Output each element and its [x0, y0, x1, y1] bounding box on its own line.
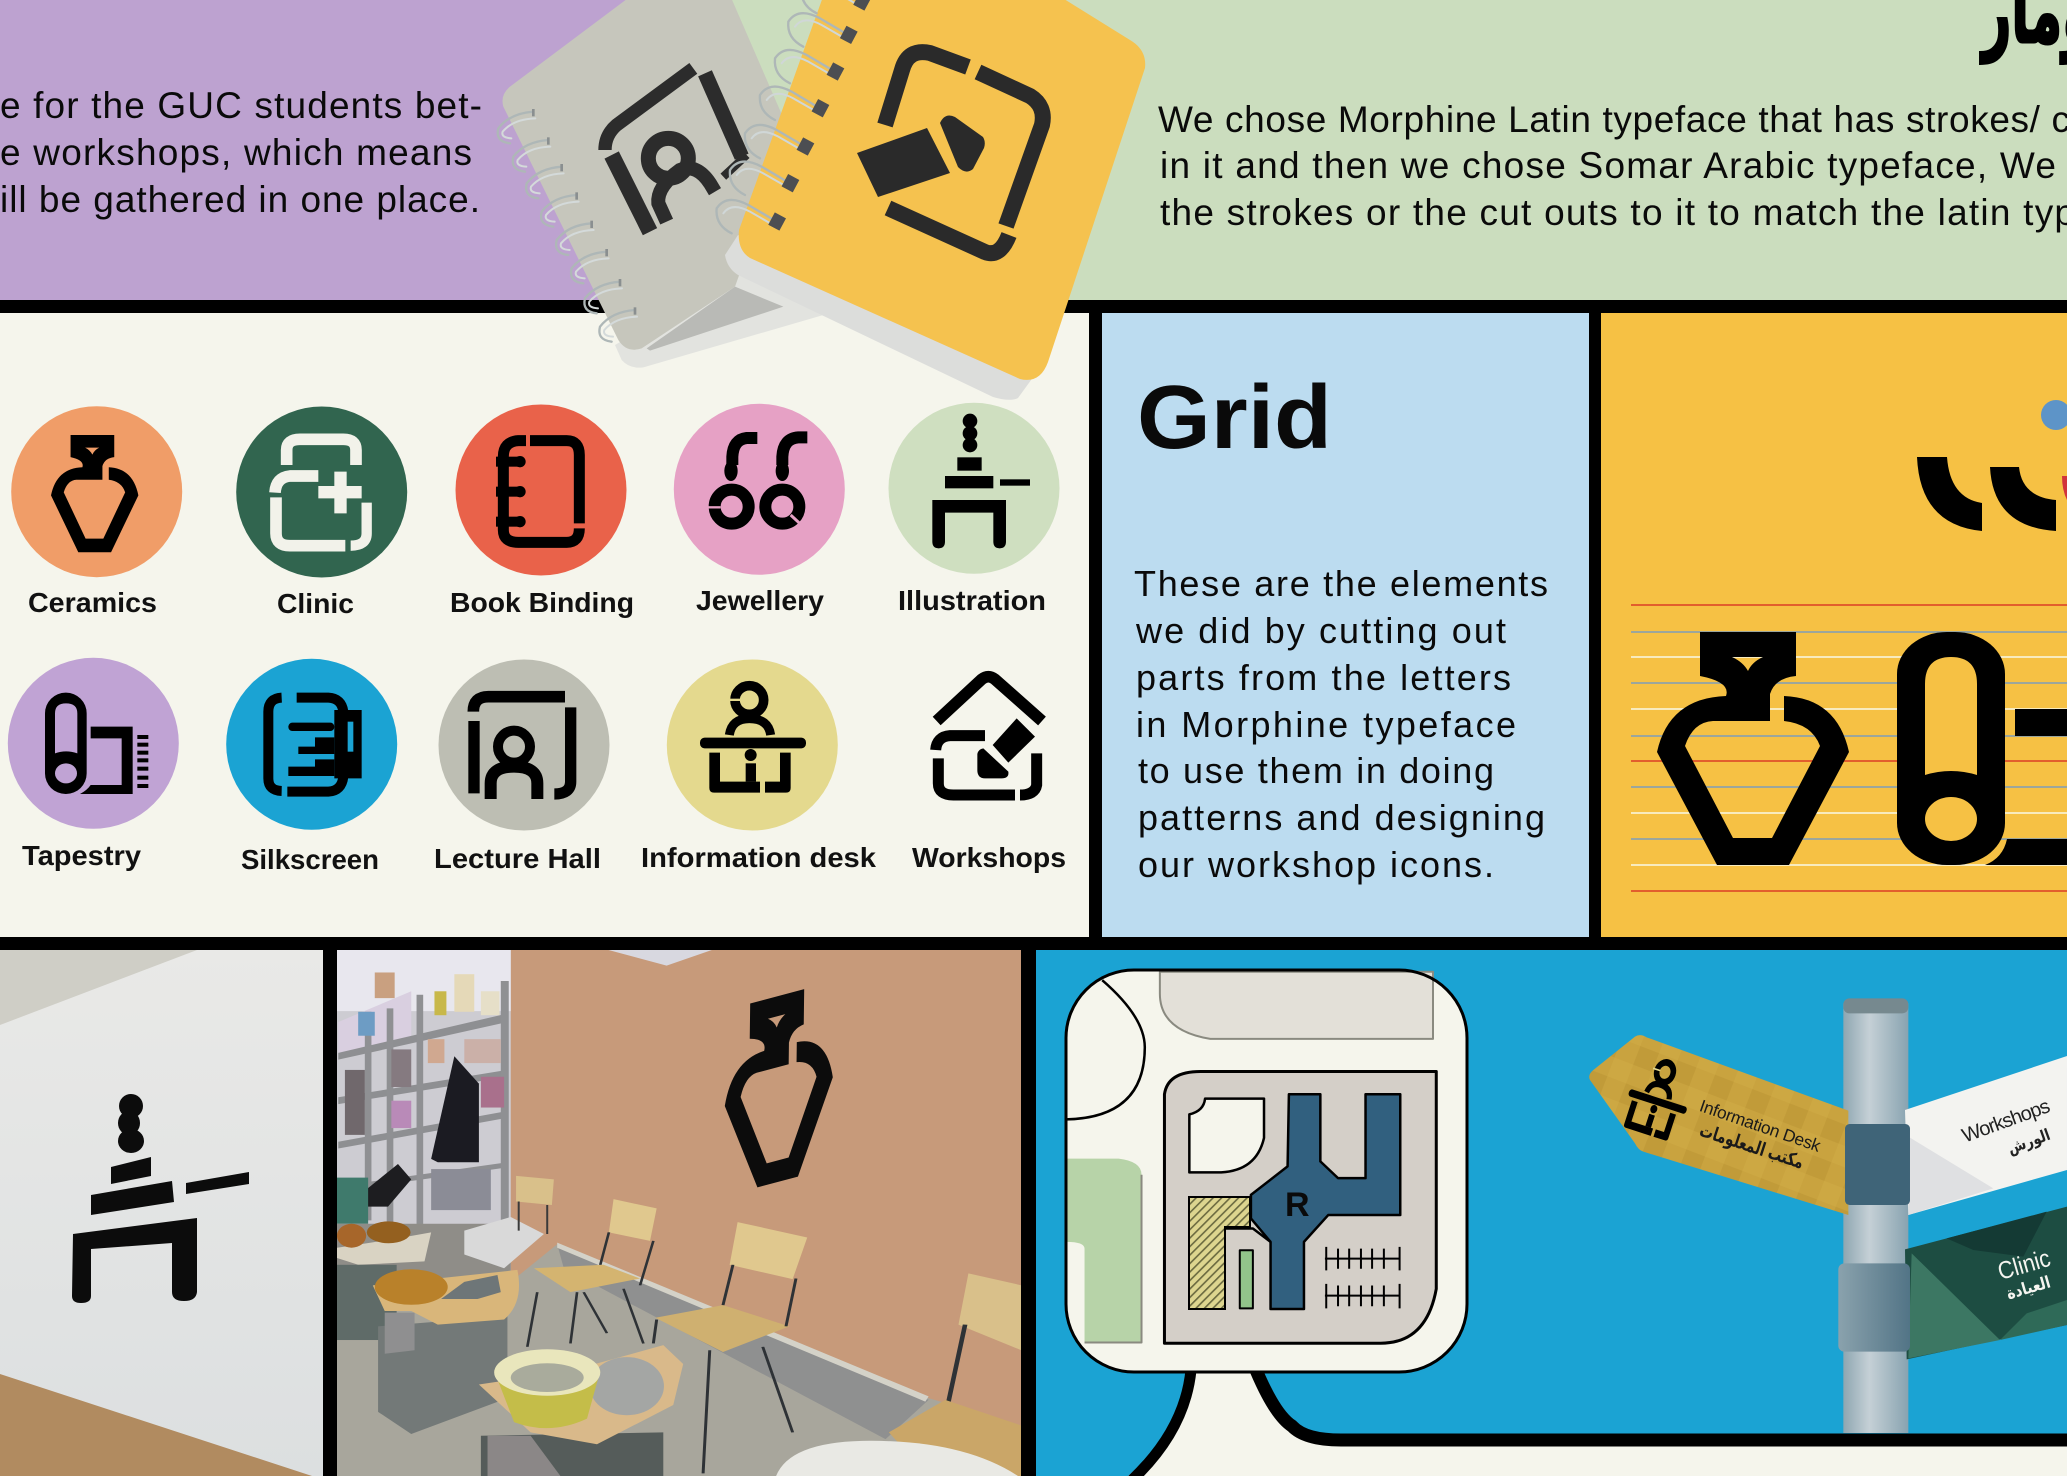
text block: concept intro: e workshops, which means — [0, 132, 472, 173]
panel: blue wayfinding — [1036, 950, 2067, 1476]
sign: Workshops — [1905, 1056, 2067, 1215]
panel: purple concept intro — [0, 0, 720, 300]
icon: Illustration — [888, 403, 1060, 616]
text block: grid description: in Morphine typeface — [1136, 704, 1516, 745]
map label R: R — [1285, 1186, 1310, 1224]
bracket: upper — [1845, 1124, 1910, 1205]
wheel 2 — [481, 1432, 663, 1476]
icon: Clinic — [236, 406, 407, 619]
panel: green typography — [720, 0, 2067, 300]
icon: Information desk — [641, 660, 876, 873]
icon: Jewellery — [674, 404, 845, 616]
label: Jewellery: Jewellery — [696, 585, 824, 616]
icon: Silkscreen — [226, 659, 397, 875]
text block: concept intro — [0, 85, 482, 220]
map hatched area — [1189, 1197, 1250, 1309]
chair 1 — [516, 1176, 554, 1205]
chair 2 — [609, 1199, 657, 1241]
map drawing — [1066, 972, 1436, 1343]
icon: Lecture Hall — [434, 660, 610, 874]
bracket: lower — [1838, 1263, 1910, 1352]
map: campus site plan — [1066, 970, 1467, 1372]
text block: typeface description: in it and then we chose Somar Arabic typeface, We — [1160, 145, 2056, 186]
label: Workshops: Workshops — [912, 842, 1066, 873]
chair 4 — [958, 1273, 1021, 1350]
text block: grid description: our workshop icons. — [1138, 844, 1494, 885]
grey notebook — [498, 0, 823, 368]
text block: grid description: These are the elements — [1134, 563, 1548, 604]
yellow notebook icon — [857, 52, 1043, 253]
label: Tapestry: Tapestry — [22, 840, 141, 871]
text block: grid description: we did by cutting out — [1135, 610, 1506, 651]
icon: blue dot — [2041, 400, 2067, 430]
label: Lecture Hall: Lecture Hall — [434, 843, 601, 874]
icon: construction vase — [1657, 632, 1849, 865]
chart: construction grid lines — [1631, 605, 2067, 891]
heading: Grid: Grid — [1137, 368, 1332, 468]
text block: concept intro: ill be gathered in one place. — [0, 179, 480, 220]
sign: Clinic: العيادة — [2004, 1273, 2053, 1303]
label: Silkscreen: Silkscreen — [241, 844, 379, 875]
icon: vase wall decal — [724, 981, 834, 1196]
sign: Clinic: Clinic — [1995, 1245, 2054, 1286]
text block: concept intro: e for the GUC students bet- — [0, 85, 482, 126]
wheel 1 — [378, 1316, 507, 1434]
text block: grid description: patterns and designing — [1138, 797, 1545, 838]
chair 3 — [730, 1222, 807, 1279]
pole cap — [1843, 998, 1908, 1013]
icon: Tapestry — [8, 658, 179, 871]
white tub — [776, 1441, 1018, 1476]
text block: grid description: to use them in doing — [1138, 750, 1494, 791]
panel: grid explanation — [1102, 313, 1589, 937]
grey notebook icon — [605, 68, 747, 232]
sign: Information Desk: مكتب المعلومات — [1697, 1119, 1807, 1174]
text block: typeface description: We chose Morphine Latin typeface that has strokes/ c — [1158, 99, 2067, 140]
grey notebook pages — [615, 273, 823, 368]
pole — [1843, 1003, 1908, 1433]
label: Clinic: Clinic — [277, 588, 354, 619]
sign: Clinic — [1905, 1207, 2067, 1359]
label: Illustration: Illustration — [898, 585, 1046, 616]
text block: grid description — [1134, 563, 1548, 885]
yellow notebook pages — [725, 235, 1034, 400]
text block: typeface description — [1158, 99, 2067, 233]
yellow notebook cover — [739, 0, 1145, 380]
icon: Book Binding — [450, 404, 634, 618]
grey notebook spiral — [498, 109, 637, 342]
label: Information desk: Information desk — [641, 842, 876, 873]
sign: Information Desk: Information Desk — [1697, 1096, 1824, 1156]
photo: illustration wall sign — [0, 950, 323, 1476]
icon: illustration wall decal — [72, 1094, 249, 1303]
map outer border — [1066, 970, 1467, 1372]
grey notebook cover — [502, 0, 790, 350]
label: Ceramics: Ceramics — [28, 587, 157, 618]
text block: grid description: parts from the letters — [1136, 657, 1511, 698]
label: Book Binding: Book Binding — [450, 587, 634, 618]
sign: Information Desk — [1589, 1035, 1848, 1215]
sign: Workshops: Workshops — [1959, 1095, 2053, 1147]
panel: yellow icon grid construction — [1601, 313, 2067, 937]
scene in photo — [337, 950, 1027, 1476]
shape: map stand and ground line — [1128, 1370, 2067, 1476]
sign: Workshops: الورش — [2006, 1127, 2053, 1158]
icon: Ceramics — [11, 406, 182, 618]
illustration: grey and yellow notebooks — [498, 0, 1145, 400]
icon: construction tapestry roll — [1897, 632, 2067, 865]
icon: construction arcs — [1917, 457, 2067, 531]
text block: typeface description: the strokes or the cut outs to it to match the latin typ — [1160, 192, 2067, 233]
signpost — [1589, 998, 2067, 1433]
icon: Workshops — [912, 677, 1066, 873]
panel: workshop icons background — [0, 313, 1089, 937]
photo: ceramics workshop wall sign — [337, 950, 1027, 1476]
yellow notebook spiral — [717, 0, 871, 233]
